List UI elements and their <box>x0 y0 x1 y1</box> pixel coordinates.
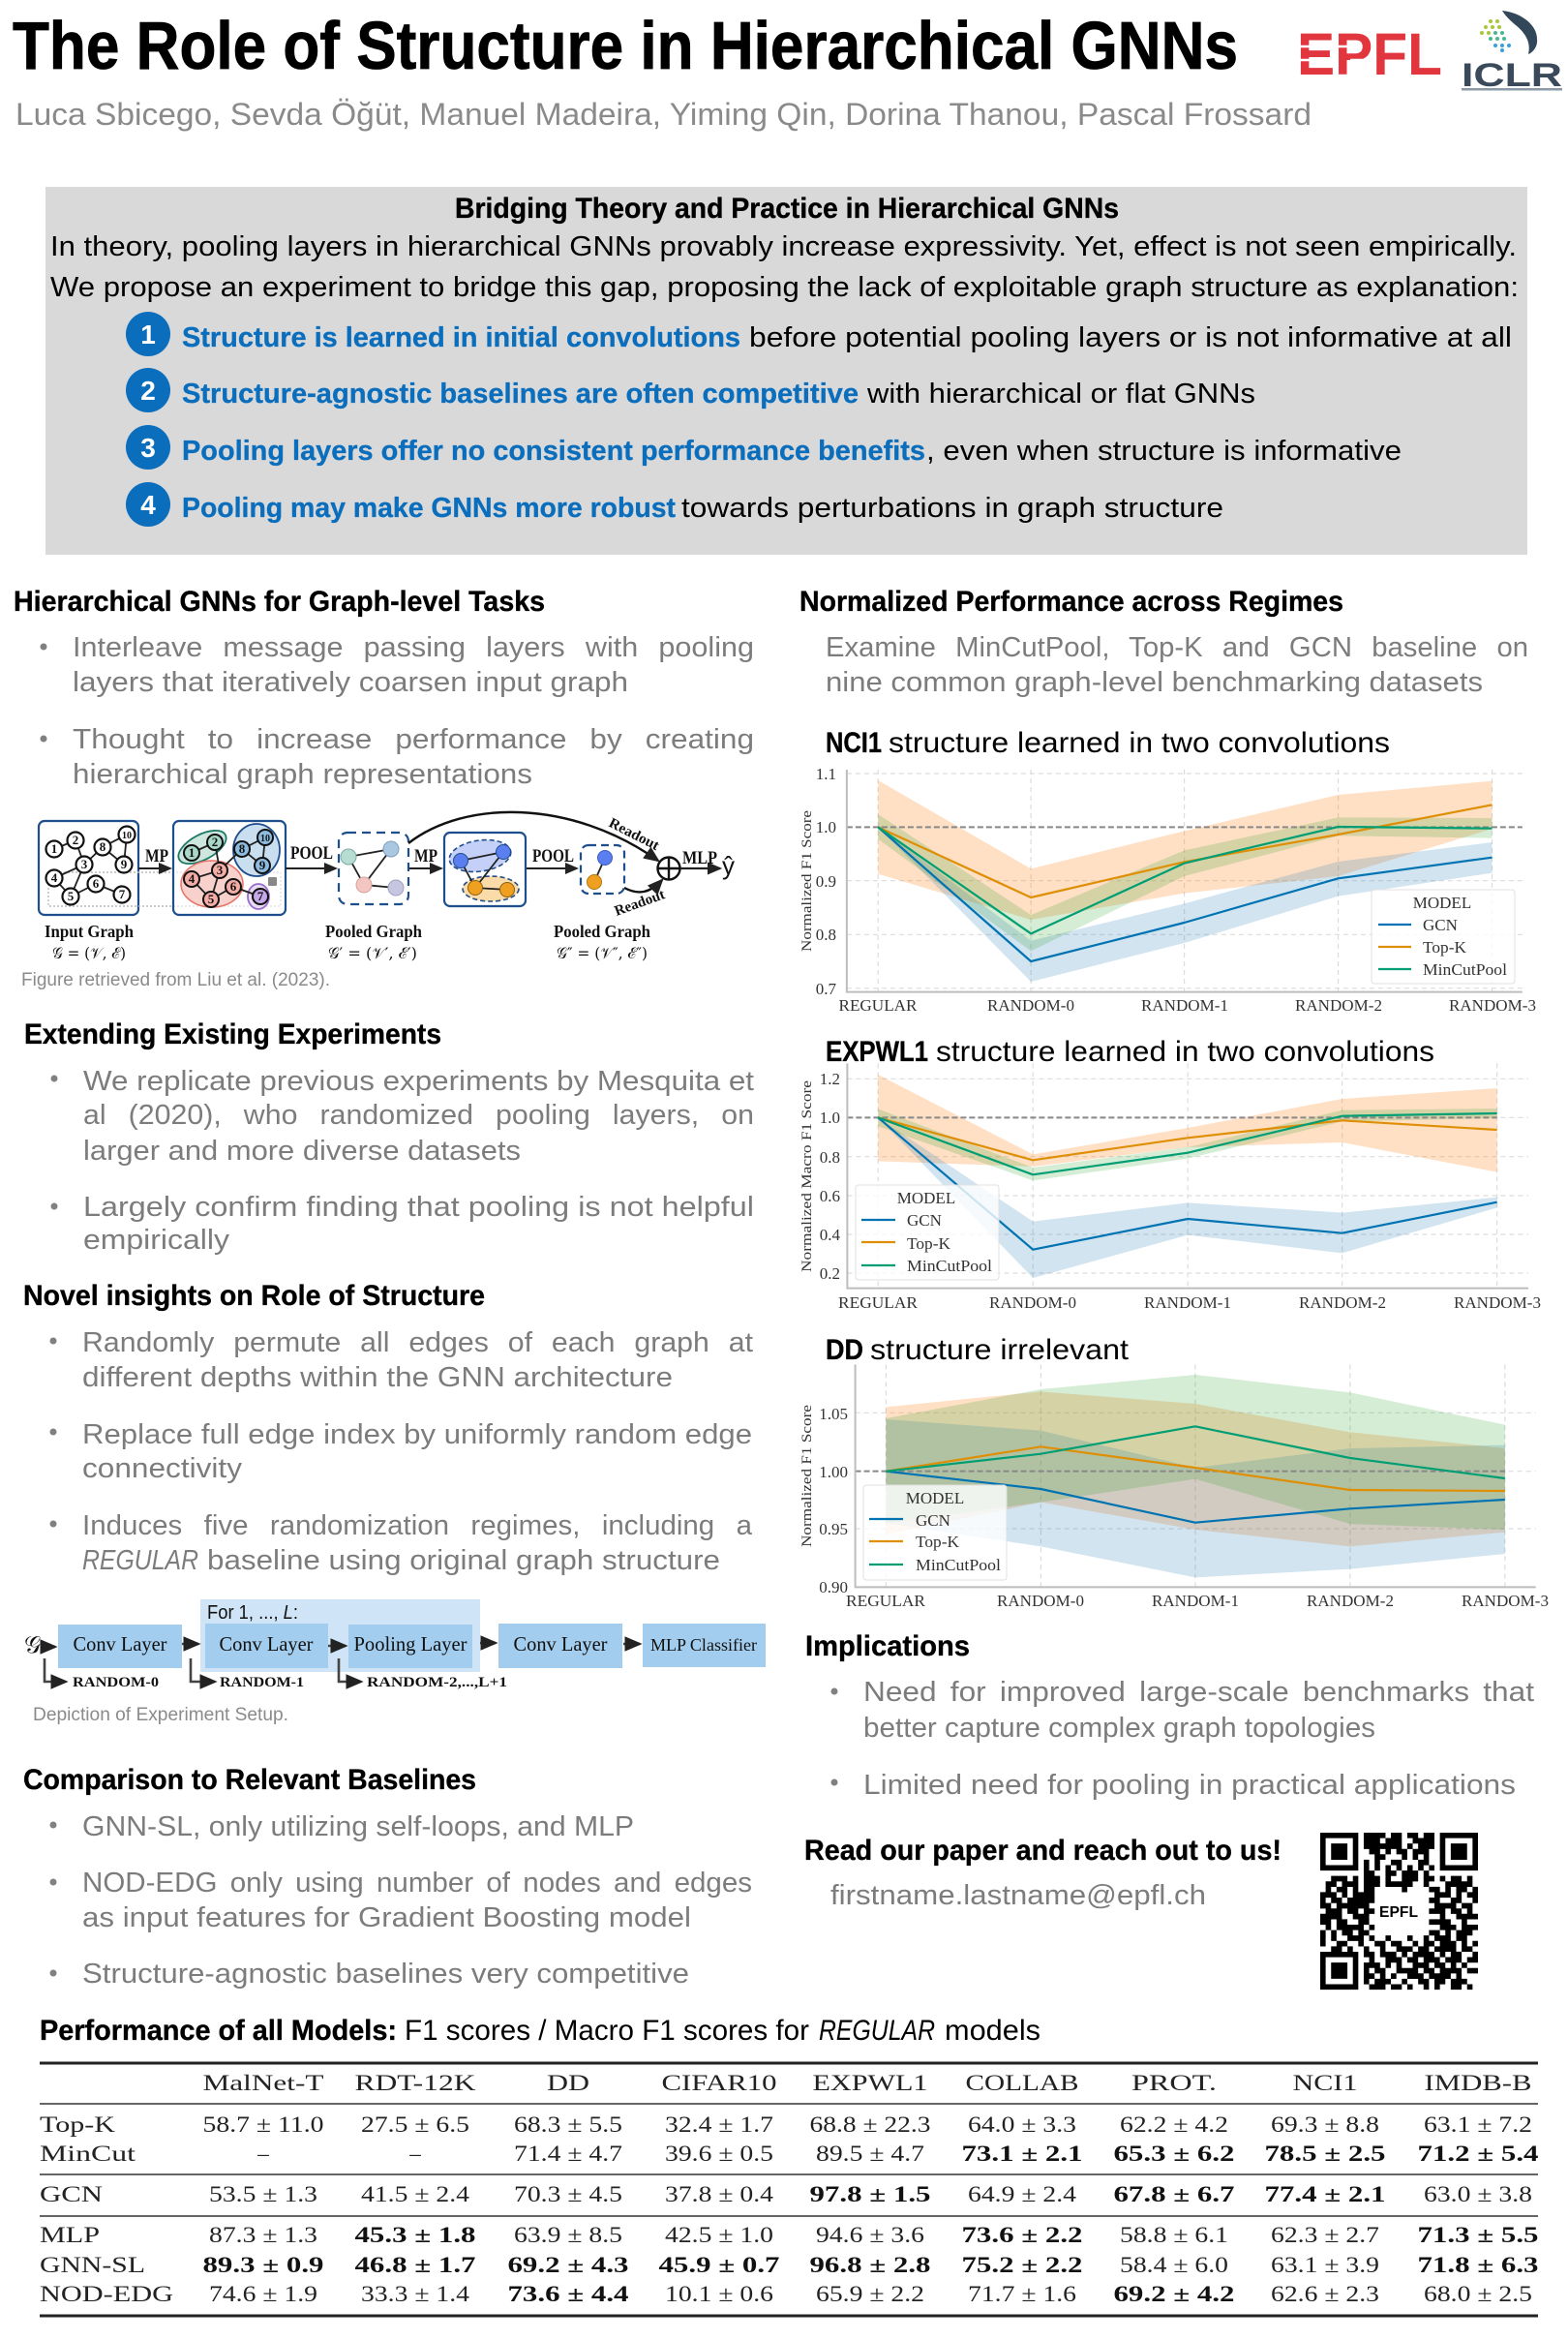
clustered graph box: 7 <box>257 889 264 903</box>
table header row: RDT-12K <box>354 2071 476 2095</box>
input graph box: 1 <box>51 841 57 856</box>
text block: normalized performance: Examine MinCutPool, Top-K and GCN baseline on <box>826 632 1528 663</box>
axis labels: RANDOM-2 <box>1307 1592 1394 1610</box>
text block: hierarchical GNNs bullets: hierarchical graph representations <box>73 759 532 790</box>
readout arrows: Readout <box>613 887 667 920</box>
legend: MODEL <box>897 1189 955 1207</box>
text block: baselines bullets <box>50 1811 752 1990</box>
finding 4: towards perturbations in graph structure <box>681 493 1223 524</box>
row: GNN-SL: GNN-SL <box>40 2253 145 2277</box>
row: Top-K: 68.3 ± 5.5 <box>514 2112 622 2137</box>
legend: Top-K <box>1423 938 1467 957</box>
row: MLP: 63.9 ± 8.5 <box>514 2223 622 2247</box>
input graph box: 3 <box>81 857 88 871</box>
axis labels: 0.9 <box>816 872 836 891</box>
aggregate and output: ŷ <box>722 851 735 880</box>
layer boxes: Conv Layer <box>219 1632 314 1656</box>
row: MLP: 94.6 ± 3.6 <box>816 2223 924 2247</box>
readout arrows <box>408 812 667 920</box>
chart heading: EXPWL1: EXPWL1 <box>826 1036 928 1068</box>
chart heading: NCI1: NCI1 <box>826 727 882 759</box>
layer boxes: MLP Classifier <box>650 1635 757 1655</box>
figure captions: Input Graph <box>45 922 134 941</box>
figure captions: 𝒢 = (𝒱, ℰ) <box>52 944 126 962</box>
figure: hierarchical pooling pipeline <box>39 812 735 962</box>
chart heading: NCI1: structure learned in two convolutions <box>889 727 1390 759</box>
text block: extending experiments bullets <box>50 1066 754 1256</box>
row: MinCut: 71.2 ± 5.4 <box>1417 2142 1539 2166</box>
text block: extending experiments bullets: larger and more diverse datasets <box>83 1136 521 1167</box>
axis labels: 0.90 <box>819 1578 848 1596</box>
axis labels: 0.4 <box>820 1226 840 1244</box>
input graph box: 5 <box>68 889 75 903</box>
row: Top-K <box>40 2112 1532 2137</box>
finding 1: 1 <box>140 319 156 349</box>
heading: hierarchical GNNs: Hierarchical GNNs for Graph-level Tasks <box>14 586 545 618</box>
table header row <box>203 2071 1531 2095</box>
axis labels <box>799 1070 1541 1312</box>
layer boxes: Conv Layer <box>513 1632 608 1656</box>
legend: GCN <box>907 1211 942 1230</box>
finding 3: Pooling layers offer no consistent performance benefits <box>182 436 925 467</box>
axis labels: 1.0 <box>820 1109 840 1127</box>
table heading: F1 scores / Macro F1 scores for <box>405 2015 809 2047</box>
table header row: EXPWL1 <box>813 2071 927 2095</box>
row: MLP: 42.5 ± 1.0 <box>665 2223 773 2247</box>
legend: MODEL <box>1413 894 1471 912</box>
text block: implications bullets <box>830 1677 1534 1801</box>
line chart: NCI1 <box>799 765 1536 1015</box>
heading: implications: Implications <box>805 1630 970 1662</box>
text block: baselines bullets: as input features for Gradient Boosting model <box>82 1902 691 1933</box>
text block: extending experiments bullets: empirically <box>83 1225 230 1256</box>
intro text <box>50 231 1519 303</box>
row: MinCut: 65.3 ± 6.2 <box>1113 2142 1235 2166</box>
row: NOD-EDG: 74.6 ± 1.9 <box>209 2282 317 2306</box>
finding 1: Structure is learned in initial convolutions <box>182 322 740 353</box>
axis labels: 0.2 <box>820 1264 840 1283</box>
axis labels: 0.7 <box>816 980 836 998</box>
intro text: In theory, pooling layers in hierarchical GNNs provably increase expressivity. Yet, effect is not seen empirically. <box>50 231 1517 262</box>
axis labels: RANDOM-0 <box>989 1293 1076 1312</box>
arrows and labels MP / POOL: MP <box>145 846 168 866</box>
row: GNN-SL: 58.4 ± 6.0 <box>1120 2253 1228 2277</box>
figure: experiment setup <box>24 1599 766 1690</box>
row: GCN: 41.5 ± 2.4 <box>361 2182 470 2206</box>
clustered graph box: 9 <box>259 858 266 872</box>
finding 2: Structure-agnostic baselines are often competitive <box>182 379 859 410</box>
input graph box: 6 <box>93 876 100 891</box>
heading: contact: Read our paper and reach out to us! <box>804 1835 1282 1867</box>
axis labels: RANDOM-3 <box>1449 996 1536 1015</box>
row: MinCut: 71.4 ± 4.7 <box>514 2142 622 2166</box>
row: NOD-EDG: 68.0 ± 2.5 <box>1424 2282 1532 2306</box>
input symbol: 𝒢 <box>24 1632 41 1658</box>
row: GNN-SL: 75.2 ± 2.2 <box>962 2253 1082 2277</box>
row: Top-K: 32.4 ± 1.7 <box>665 2112 773 2137</box>
clustered graph box <box>173 821 286 915</box>
axis labels: RANDOM-3 <box>1454 1293 1541 1312</box>
table heading <box>40 2015 1040 2047</box>
text block: extending experiments bullets: We replicate previous experiments by Mesquita et <box>83 1066 754 1097</box>
table header row: NCI1 <box>1293 2071 1357 2095</box>
text block: hierarchical GNNs bullets <box>41 632 754 790</box>
row: GCN: 53.5 ± 1.3 <box>209 2182 317 2206</box>
axis labels: 0.6 <box>820 1187 840 1205</box>
aggregate and output <box>658 848 735 880</box>
readout arrows: Readout <box>606 815 661 854</box>
axis labels: REGULAR <box>838 1293 919 1312</box>
legend: Top-K <box>916 1533 960 1551</box>
table heading: Performance of all Models: <box>40 2015 397 2047</box>
legend: MinCutPool <box>1423 960 1507 979</box>
row: MLP: MLP <box>40 2223 100 2247</box>
row: Top-K: Top-K <box>40 2112 116 2137</box>
row: NOD-EDG: 73.6 ± 4.4 <box>507 2282 629 2306</box>
row: NOD-EDG: NOD-EDG <box>40 2282 173 2306</box>
logo: ICLR: ICLR <box>1462 57 1562 94</box>
axis labels: REGULAR <box>846 1592 926 1610</box>
clustered graph box: 8 <box>239 841 246 856</box>
text block: extending experiments bullets: Largely confirm finding that pooling is not helpful <box>83 1192 754 1223</box>
axis labels: 1.2 <box>820 1070 840 1088</box>
text block: hierarchical GNNs bullets: Thought to increase performance by creating <box>73 724 754 755</box>
row: GCN: 64.9 ± 2.4 <box>968 2182 1077 2206</box>
figure note: Liu et al.: Figure retrieved from Liu et al. (2023). <box>21 970 330 990</box>
axis labels: RANDOM-0 <box>997 1592 1084 1610</box>
input graph box: 2 <box>73 833 78 847</box>
clustered graph box: 2 <box>212 835 218 849</box>
text block: novel insights bullets <box>50 1327 753 1576</box>
table header row: IMDB-B <box>1425 2071 1531 2095</box>
row: NOD-EDG: 33.3 ± 1.4 <box>361 2282 470 2306</box>
row: MLP: 62.3 ± 2.7 <box>1271 2223 1379 2247</box>
legend: MinCutPool <box>907 1257 992 1275</box>
finding 3: 3 <box>140 433 156 463</box>
figure note: experiment setup: Depiction of Experiment Setup. <box>33 1705 288 1725</box>
finding 3: , even when structure is informative <box>926 436 1402 467</box>
text block: novel insights bullets: Randomly permute all edges of each graph at <box>82 1327 753 1358</box>
chart heading: DD: structure irrelevant <box>870 1334 1130 1366</box>
clustered graph box: 5 <box>208 892 215 906</box>
authors: Luca Sbicego, Sevda Öğüt, Manuel Madeira, Yiming Qin, Dorina Thanou, Pascal Frossard <box>15 97 1312 132</box>
table header row: COLLAB <box>966 2071 1078 2095</box>
row: GNN-SL: 89.3 ± 0.9 <box>203 2253 323 2277</box>
legend: MODEL <box>906 1489 964 1507</box>
axis labels: Normalized Macro F1 Score <box>799 1080 815 1272</box>
axis labels: 0.8 <box>816 926 836 944</box>
row: Top-K: 68.8 ± 22.3 <box>809 2112 931 2137</box>
table: performance of all models <box>40 2063 1539 2316</box>
input graph box <box>39 821 281 915</box>
randomization labels <box>73 1675 507 1690</box>
title: The Role of Structure in Hierarchical GNNs <box>13 8 1238 83</box>
row: NOD-EDG: 10.1 ± 0.6 <box>665 2282 773 2306</box>
row: GNN-SL: 46.8 ± 1.7 <box>354 2253 476 2277</box>
logo: EPFL: EPFL <box>1297 21 1442 87</box>
axis labels: 0.8 <box>820 1148 840 1167</box>
row: GCN: 37.8 ± 0.4 <box>665 2182 774 2206</box>
text block: novel insights bullets: REGULAR <box>82 1545 198 1576</box>
finding 1: before potential pooling layers or is not informative at all <box>749 322 1512 353</box>
layer boxes: Conv Layer <box>74 1632 166 1656</box>
legend: Top-K <box>907 1234 951 1253</box>
axis labels: RANDOM-0 <box>987 996 1074 1015</box>
legend: MinCutPool <box>916 1556 1001 1574</box>
axis labels <box>799 1405 1549 1610</box>
finding 4: Pooling may make GNNs more robust <box>182 493 676 524</box>
heading: extending experiments: Extending Existing Experiments <box>24 1018 441 1050</box>
input graph box: 4 <box>51 870 58 885</box>
line chart: EXPWL1 <box>799 1063 1541 1312</box>
text block: implications bullets: Limited need for pooling in practical applications <box>863 1770 1516 1801</box>
row: MinCut: – <box>408 2142 421 2166</box>
row: MinCut: 39.6 ± 0.5 <box>665 2142 773 2166</box>
panel heading: Bridging Theory and Practice in Hierarchical GNNs <box>455 193 1119 225</box>
row: GNN-SL: 71.8 ± 6.3 <box>1417 2253 1539 2277</box>
arrows and labels MP / POOL: MP <box>414 846 437 866</box>
row: MLP: 87.3 ± 1.3 <box>209 2223 317 2247</box>
icon: QR code: EPFL <box>1379 1904 1418 1921</box>
axis labels: 1.1 <box>816 765 836 783</box>
row: GNN-SL: 69.2 ± 4.3 <box>507 2253 629 2277</box>
table header row: MalNet-T <box>203 2071 323 2095</box>
table header row: DD <box>547 2071 589 2095</box>
figure captions: 𝒢′ = (𝒱′, ℰ′) <box>328 944 417 962</box>
row: Top-K: 62.2 ± 4.2 <box>1120 2112 1228 2137</box>
finding 2: with hierarchical or flat GNNs <box>866 379 1255 410</box>
figure captions: Pooled Graph <box>325 922 422 941</box>
axis labels: 1.00 <box>819 1463 848 1481</box>
heading: normalized performance: Normalized Performance across Regimes <box>799 586 1343 618</box>
finding 3 <box>126 425 1402 470</box>
repeat block <box>200 1599 480 1672</box>
clustered graph box: 4 <box>189 871 196 886</box>
randomization labels: RANDOM-2,...,L+1 <box>367 1675 507 1690</box>
arrows and labels MP / POOL <box>138 843 577 868</box>
text block: novel insights bullets: baseline using original graph structure <box>207 1545 720 1576</box>
row: GNN-SL: 45.9 ± 0.7 <box>658 2253 780 2277</box>
figure captions: 𝒢″ = (𝒱″, ℰ″) <box>557 944 648 962</box>
message passing box <box>444 833 526 906</box>
input graph box: 7 <box>119 887 126 901</box>
axis labels: Normalized F1 Score <box>799 1405 815 1547</box>
row: Top-K: 63.1 ± 7.2 <box>1424 2112 1532 2137</box>
axis labels: RANDOM-1 <box>1141 996 1228 1015</box>
row: MinCut: MinCut <box>40 2142 136 2166</box>
flow arrows <box>43 1643 640 1682</box>
row: MLP <box>40 2223 1539 2247</box>
layer boxes: Pooling Layer <box>354 1632 467 1656</box>
text block: baselines bullets: Structure-agnostic baselines very competitive <box>82 1959 689 1990</box>
row: MinCut: – <box>256 2142 269 2166</box>
input graph box: 8 <box>100 839 106 854</box>
text block: novel insights bullets: different depths within the GNN architecture <box>82 1362 673 1393</box>
row: MLP: 45.3 ± 1.8 <box>354 2223 476 2247</box>
clustered graph box: 6 <box>230 879 237 894</box>
pooled graph 1 <box>339 833 408 904</box>
plot area <box>847 1063 1528 1289</box>
text block: normalized performance: nine common graph-level benchmarking datasets <box>826 667 1483 698</box>
finding 4 <box>126 482 1223 527</box>
legend: GCN <box>916 1511 950 1530</box>
row: MLP: 71.3 ± 5.5 <box>1417 2223 1539 2247</box>
text block: baselines bullets: GNN-SL, only utilizing self-loops, and MLP <box>82 1811 634 1842</box>
heading: novel insights: Novel insights on Role of Structure <box>23 1280 485 1312</box>
contact email: firstname.lastname@epfl.ch <box>830 1880 1206 1911</box>
text block: hierarchical GNNs bullets: Interleave message passing layers with pooling <box>73 632 754 663</box>
intro text: We propose an experiment to bridge this gap, proposing the lack of exploitable graph structure as explanation: <box>50 272 1519 303</box>
row: MinCut: 78.5 ± 2.5 <box>1264 2142 1386 2166</box>
randomization labels: RANDOM-1 <box>220 1675 304 1690</box>
chart heading: EXPWL1: structure learned in two convolutions <box>936 1036 1434 1068</box>
row: GNN-SL: 96.8 ± 2.8 <box>809 2253 931 2277</box>
axis labels: RANDOM-2 <box>1295 996 1382 1015</box>
axis labels: 1.05 <box>819 1405 848 1423</box>
table heading: models <box>945 2015 1040 2047</box>
text block: novel insights bullets: Induces five randomization regimes, including a <box>82 1510 753 1541</box>
row: Top-K: 69.3 ± 8.8 <box>1271 2112 1379 2137</box>
legend <box>856 1185 999 1280</box>
plot area <box>847 770 1523 992</box>
row: Top-K: 27.5 ± 6.5 <box>361 2112 469 2137</box>
row: GCN: 63.0 ± 3.8 <box>1424 2182 1532 2206</box>
row: GCN: 77.4 ± 2.1 <box>1264 2182 1386 2206</box>
legend <box>863 1485 1007 1580</box>
pooled graph 2 <box>581 845 624 894</box>
text block: implications bullets: better capture complex graph topologies <box>863 1713 1375 1744</box>
row: GNN-SL: 63.1 ± 3.9 <box>1271 2253 1379 2277</box>
row: MinCut: 89.5 ± 4.7 <box>816 2142 924 2166</box>
text block: hierarchical GNNs bullets: layers that iteratively coarsen input graph <box>73 667 628 698</box>
aggregate and output: MLP <box>682 848 717 868</box>
row: NOD-EDG: 71.7 ± 1.6 <box>968 2282 1076 2306</box>
logo: ICLR <box>1462 11 1562 94</box>
row: GCN: 67.8 ± 6.7 <box>1113 2182 1235 2206</box>
table header row: CIFAR10 <box>662 2071 776 2095</box>
finding 2 <box>126 368 1255 412</box>
row: GNN-SL <box>40 2253 1539 2277</box>
clustered graph box: 1 <box>189 845 195 860</box>
row: NOD-EDG: 62.6 ± 2.3 <box>1271 2282 1379 2306</box>
row: MLP: 73.6 ± 2.2 <box>962 2223 1082 2247</box>
axis labels: RANDOM-3 <box>1462 1592 1549 1610</box>
row: GCN: 97.8 ± 1.5 <box>809 2182 931 2206</box>
figure captions: Pooled Graph <box>554 922 650 941</box>
heading: baselines: Comparison to Relevant Baselines <box>23 1764 476 1796</box>
axis labels: REGULAR <box>838 996 918 1015</box>
axis labels: RANDOM-1 <box>1152 1592 1239 1610</box>
text block: normalized performance <box>826 632 1528 698</box>
row: NOD-EDG: 69.2 ± 4.2 <box>1113 2282 1235 2306</box>
arrows and labels MP / POOL: POOL <box>532 846 574 866</box>
randomization labels: RANDOM-0 <box>73 1675 159 1690</box>
text block: novel insights bullets: Replace full edge index by uniformly random edge <box>82 1419 752 1450</box>
axis labels: Normalized F1 Score <box>799 810 815 952</box>
line chart: DD <box>799 1364 1549 1610</box>
layer boxes <box>58 1624 766 1668</box>
text block: extending experiments bullets: al (2020), who randomized pooling layers, on <box>83 1100 754 1131</box>
text block: novel insights bullets: connectivity <box>82 1453 243 1484</box>
text block: baselines bullets: NOD-EDG only using number of nodes and edges <box>82 1868 752 1899</box>
clustered graph box: 3 <box>217 863 224 877</box>
legend <box>1372 890 1515 984</box>
row: NOD-EDG: 65.9 ± 2.2 <box>816 2282 924 2306</box>
row: GCN: 70.3 ± 4.5 <box>514 2182 622 2206</box>
row: Top-K: 64.0 ± 3.3 <box>968 2112 1076 2137</box>
row: GCN <box>40 2182 1532 2206</box>
clustered graph box: 10 <box>260 834 270 844</box>
text block: implications bullets: Need for improved large-scale benchmarks that <box>863 1677 1534 1708</box>
finding 2: 2 <box>140 376 156 406</box>
row: MinCut <box>40 2142 1539 2166</box>
input graph box: 10 <box>122 831 132 841</box>
arrows and labels MP / POOL: POOL <box>290 843 333 864</box>
row: GCN: GCN <box>40 2182 104 2206</box>
icon: QR code <box>1320 1836 1478 1987</box>
panel: summary <box>45 187 1527 555</box>
input graph box: 9 <box>121 857 128 871</box>
figure captions <box>45 922 650 962</box>
row: NOD-EDG <box>40 2282 1532 2306</box>
axis labels: RANDOM-1 <box>1144 1293 1231 1312</box>
legend: GCN <box>1423 916 1458 934</box>
table header row: PROT. <box>1131 2071 1217 2095</box>
row: MLP: 58.8 ± 6.1 <box>1120 2223 1228 2247</box>
finding 4: 4 <box>140 490 156 520</box>
axis labels <box>799 765 1536 1015</box>
row: MinCut: 73.1 ± 2.1 <box>962 2142 1082 2166</box>
repeat block: For 1, ..., L: <box>207 1602 298 1624</box>
chart heading: DD: DD <box>826 1334 863 1366</box>
axis labels: 0.95 <box>819 1520 848 1538</box>
axis labels: 1.0 <box>816 818 836 836</box>
plot area <box>856 1364 1536 1587</box>
table heading: REGULAR <box>819 2015 935 2047</box>
axis labels: RANDOM-2 <box>1299 1293 1386 1312</box>
finding 1 <box>126 312 1512 356</box>
row: Top-K: 58.7 ± 11.0 <box>203 2112 323 2137</box>
